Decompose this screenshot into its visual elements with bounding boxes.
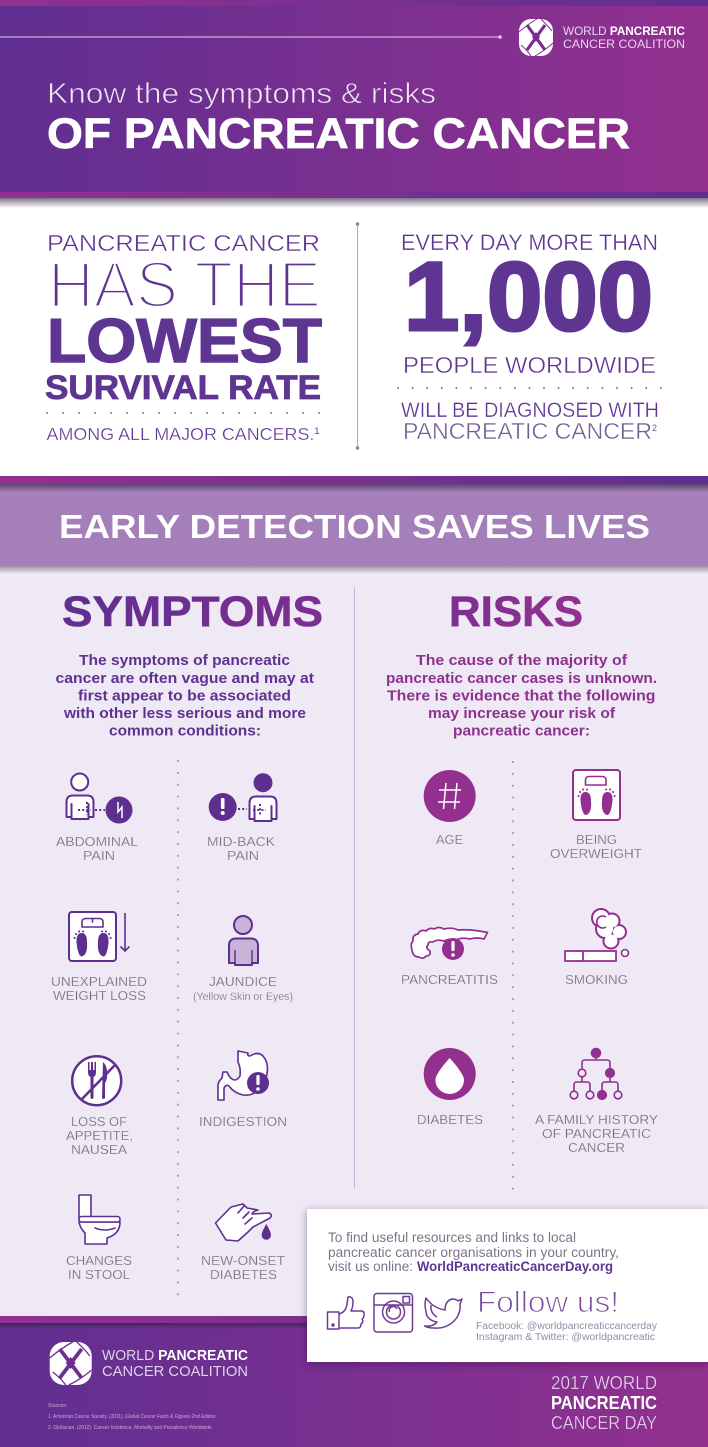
label: changes in stool — [66, 1253, 132, 1282]
label: new-onset diabetes: DIABETES — [210, 1267, 277, 1282]
symptom: new-onset diabetes — [201, 1204, 285, 1282]
label: changes in stool: IN STOOL — [68, 1267, 130, 1282]
resources text: To find useful resources and links to local — [328, 1230, 576, 1245]
stat intro: PANCREATIC CANCER — [47, 230, 320, 256]
stat pancreatic cancer: 2 — [652, 423, 657, 433]
light content background — [0, 566, 708, 1318]
label: new-onset diabetes: NEW-ONSET — [201, 1253, 285, 1268]
icon: twitter bird — [424, 1298, 462, 1328]
sources: 1. American Cancer Society. (2011). Global Cancer Facts & Figures 2nd Edition. — [48, 1414, 217, 1420]
title line 1: Know the symptoms & risks — [47, 78, 436, 110]
stat number: 1,000 — [404, 242, 653, 351]
symptom: loss of appetite — [66, 1056, 133, 1157]
label: new-onset diabetes — [201, 1253, 285, 1282]
event name: PANCREATIC — [551, 1392, 657, 1413]
icon: yellow person — [229, 916, 258, 965]
footer logo text: CANCER COALITION — [102, 1364, 248, 1380]
symptom: abdominal pain — [56, 774, 138, 863]
follow us heading: Follow us! — [477, 1286, 619, 1319]
label: mid-back pain — [207, 834, 275, 863]
label: smoking: SMOKING — [565, 972, 628, 987]
label: indigestion: INDIGESTION — [199, 1114, 287, 1129]
event name — [551, 1372, 657, 1433]
risks intro text: pancreatic cancer cases is unknown. — [386, 671, 657, 687]
label: loss of appetite, nausea — [66, 1114, 133, 1157]
label: mid-back pain: PAIN — [227, 848, 259, 863]
header logo text — [563, 24, 685, 51]
label: jaundice — [193, 974, 293, 1003]
resources text — [328, 1230, 619, 1274]
symptom: changes in stool — [66, 1195, 132, 1282]
stat panel: lowest survival rate — [45, 230, 325, 444]
risk: smoking — [565, 910, 628, 987]
symptoms heading: SYMPTOMS — [62, 588, 323, 636]
label: unexplained weight loss — [51, 974, 147, 1003]
label: family history: CANCER — [568, 1140, 625, 1155]
label: loss of appetite, nausea: APPETITE, — [66, 1128, 133, 1143]
symptoms intro text: with other less serious and more — [63, 706, 306, 722]
footer logo text — [102, 1348, 249, 1380]
stat footnote text: 1 — [314, 426, 319, 436]
label: jaundice: JAUNDICE — [209, 974, 277, 989]
icon: crossed fork and knife — [72, 1056, 121, 1105]
icon: abdominal pain — [66, 774, 132, 824]
risks intro text: may increase your risk of — [428, 706, 615, 722]
symptoms intro text — [56, 653, 314, 740]
sources: 2. Globocan. (2012). Cancer Incidence, Mortality and Prevalence Worldwide. — [48, 1425, 213, 1431]
stat has the: HAS THE — [48, 248, 321, 321]
icon: thumbs up — [328, 1297, 364, 1329]
stat footnote text: AMONG ALL MAJOR CANCERS. — [46, 424, 308, 444]
resources text: WorldPancreaticCancerDay.org — [417, 1259, 613, 1274]
label: family history: A FAMILY HISTORY — [535, 1112, 658, 1127]
label: being overweight: OVERWEIGHT — [550, 846, 642, 861]
stat lowest: LOWEST — [47, 307, 322, 376]
symptom: mid-back pain — [207, 773, 276, 863]
social handles — [476, 1320, 658, 1343]
symptoms intro text: common conditions: — [109, 724, 261, 740]
sources: Sources: — [48, 1403, 67, 1409]
risks intro text — [386, 653, 657, 740]
risk: being overweight — [550, 770, 642, 861]
symptoms intro text: cancer are often vague and may at — [56, 671, 314, 687]
label: abdominal pain — [56, 834, 138, 863]
symptom: indigestion — [199, 1051, 287, 1129]
label: changes in stool: CHANGES — [66, 1253, 132, 1268]
social handles: Instagram & Twitter: @worldpancreatic — [476, 1331, 655, 1343]
footer panel — [0, 1316, 708, 1447]
stat will be diagnosed: WILL BE DIAGNOSED WITH — [401, 398, 659, 422]
risk: age — [424, 770, 476, 847]
icon: mid-back pain — [209, 773, 276, 821]
title line 2: OF PANCREATIC CANCER — [47, 110, 630, 158]
stat divider — [356, 222, 359, 450]
header panel — [0, 0, 708, 208]
label: loss of appetite, nausea: LOSS OF — [71, 1114, 127, 1129]
label: diabetes: DIABETES — [417, 1112, 483, 1127]
header logo text: WORLD PANCREATIC — [563, 24, 685, 38]
icon: stomach — [218, 1051, 269, 1100]
stat people worldwide: PEOPLE WORLDWIDE — [403, 352, 656, 378]
risk: diabetes — [417, 1048, 483, 1127]
icon: drop in circle — [424, 1048, 476, 1100]
label: jaundice: (Yellow Skin or Eyes) — [193, 991, 293, 1003]
label: unexplained weight loss: WEIGHT LOSS — [53, 988, 146, 1003]
icon: cigarette and smoke — [565, 910, 628, 961]
sources — [48, 1403, 217, 1431]
label: abdominal pain: PAIN — [83, 848, 115, 863]
risk: pancreatitis — [401, 928, 498, 987]
icon: scale with down arrow — [69, 912, 130, 961]
icon: toilet — [79, 1195, 120, 1244]
symptom: jaundice — [193, 916, 293, 1003]
label: unexplained weight loss: UNEXPLAINED — [51, 974, 147, 989]
header logo text: CANCER COALITION — [563, 37, 685, 51]
label: pancreatitis: PANCREATITIS — [401, 972, 498, 987]
symptom: unexplained weight loss — [51, 912, 147, 1003]
early detection banner — [0, 476, 708, 574]
resources panel — [307, 1209, 708, 1362]
footer logo — [50, 1342, 92, 1385]
stat survival rate: SURVIVAL RATE — [45, 369, 321, 407]
symptoms intro text: The symptoms of pancreatic — [79, 653, 290, 669]
risks heading: RISKS — [449, 588, 583, 636]
label: family history — [535, 1112, 658, 1155]
label: mid-back pain: MID-BACK — [207, 834, 275, 849]
header logo — [519, 19, 553, 56]
icon: pancreas — [411, 928, 488, 960]
icon: scale — [573, 770, 620, 820]
label: loss of appetite, nausea: NAUSEA — [71, 1142, 127, 1157]
icon: hand with blood drop — [216, 1204, 271, 1241]
stat pancreatic cancer: PANCREATIC CANCER — [403, 418, 651, 444]
resources text: visit us online: — [328, 1259, 413, 1274]
label: being overweight — [550, 832, 642, 861]
risks intro text: There is evidence that the following — [387, 688, 656, 704]
label: being overweight: BEING — [576, 832, 617, 847]
footer logo text: WORLD PANCREATIC — [102, 1348, 249, 1364]
symptoms intro text: first appear to be associated — [78, 688, 291, 704]
risk: family history — [535, 1048, 658, 1155]
event name: CANCER DAY — [551, 1412, 657, 1433]
risks intro text: pancreatic cancer: — [453, 724, 590, 740]
label: family history: OF PANCREATIC — [542, 1126, 651, 1141]
label: age: AGE — [436, 832, 463, 847]
risks intro text: The cause of the majority of — [416, 653, 627, 669]
banner heading: EARLY DETECTION SAVES LIVES — [59, 508, 650, 545]
icon: family tree — [570, 1048, 622, 1099]
stat every day: EVERY DAY MORE THAN — [401, 230, 658, 255]
stat panel: 1,000 people — [398, 230, 662, 444]
social handles: Facebook: @worldpancreaticcancerday — [476, 1320, 658, 1332]
label: abdominal pain: ABDOMINAL — [56, 834, 138, 849]
column divider — [354, 587, 356, 1188]
icon: instagram — [374, 1294, 412, 1332]
resources text: pancreatic cancer organisations in your country, — [328, 1245, 619, 1260]
event name: 2017 WORLD — [551, 1372, 657, 1393]
icon: age hash — [424, 770, 476, 822]
